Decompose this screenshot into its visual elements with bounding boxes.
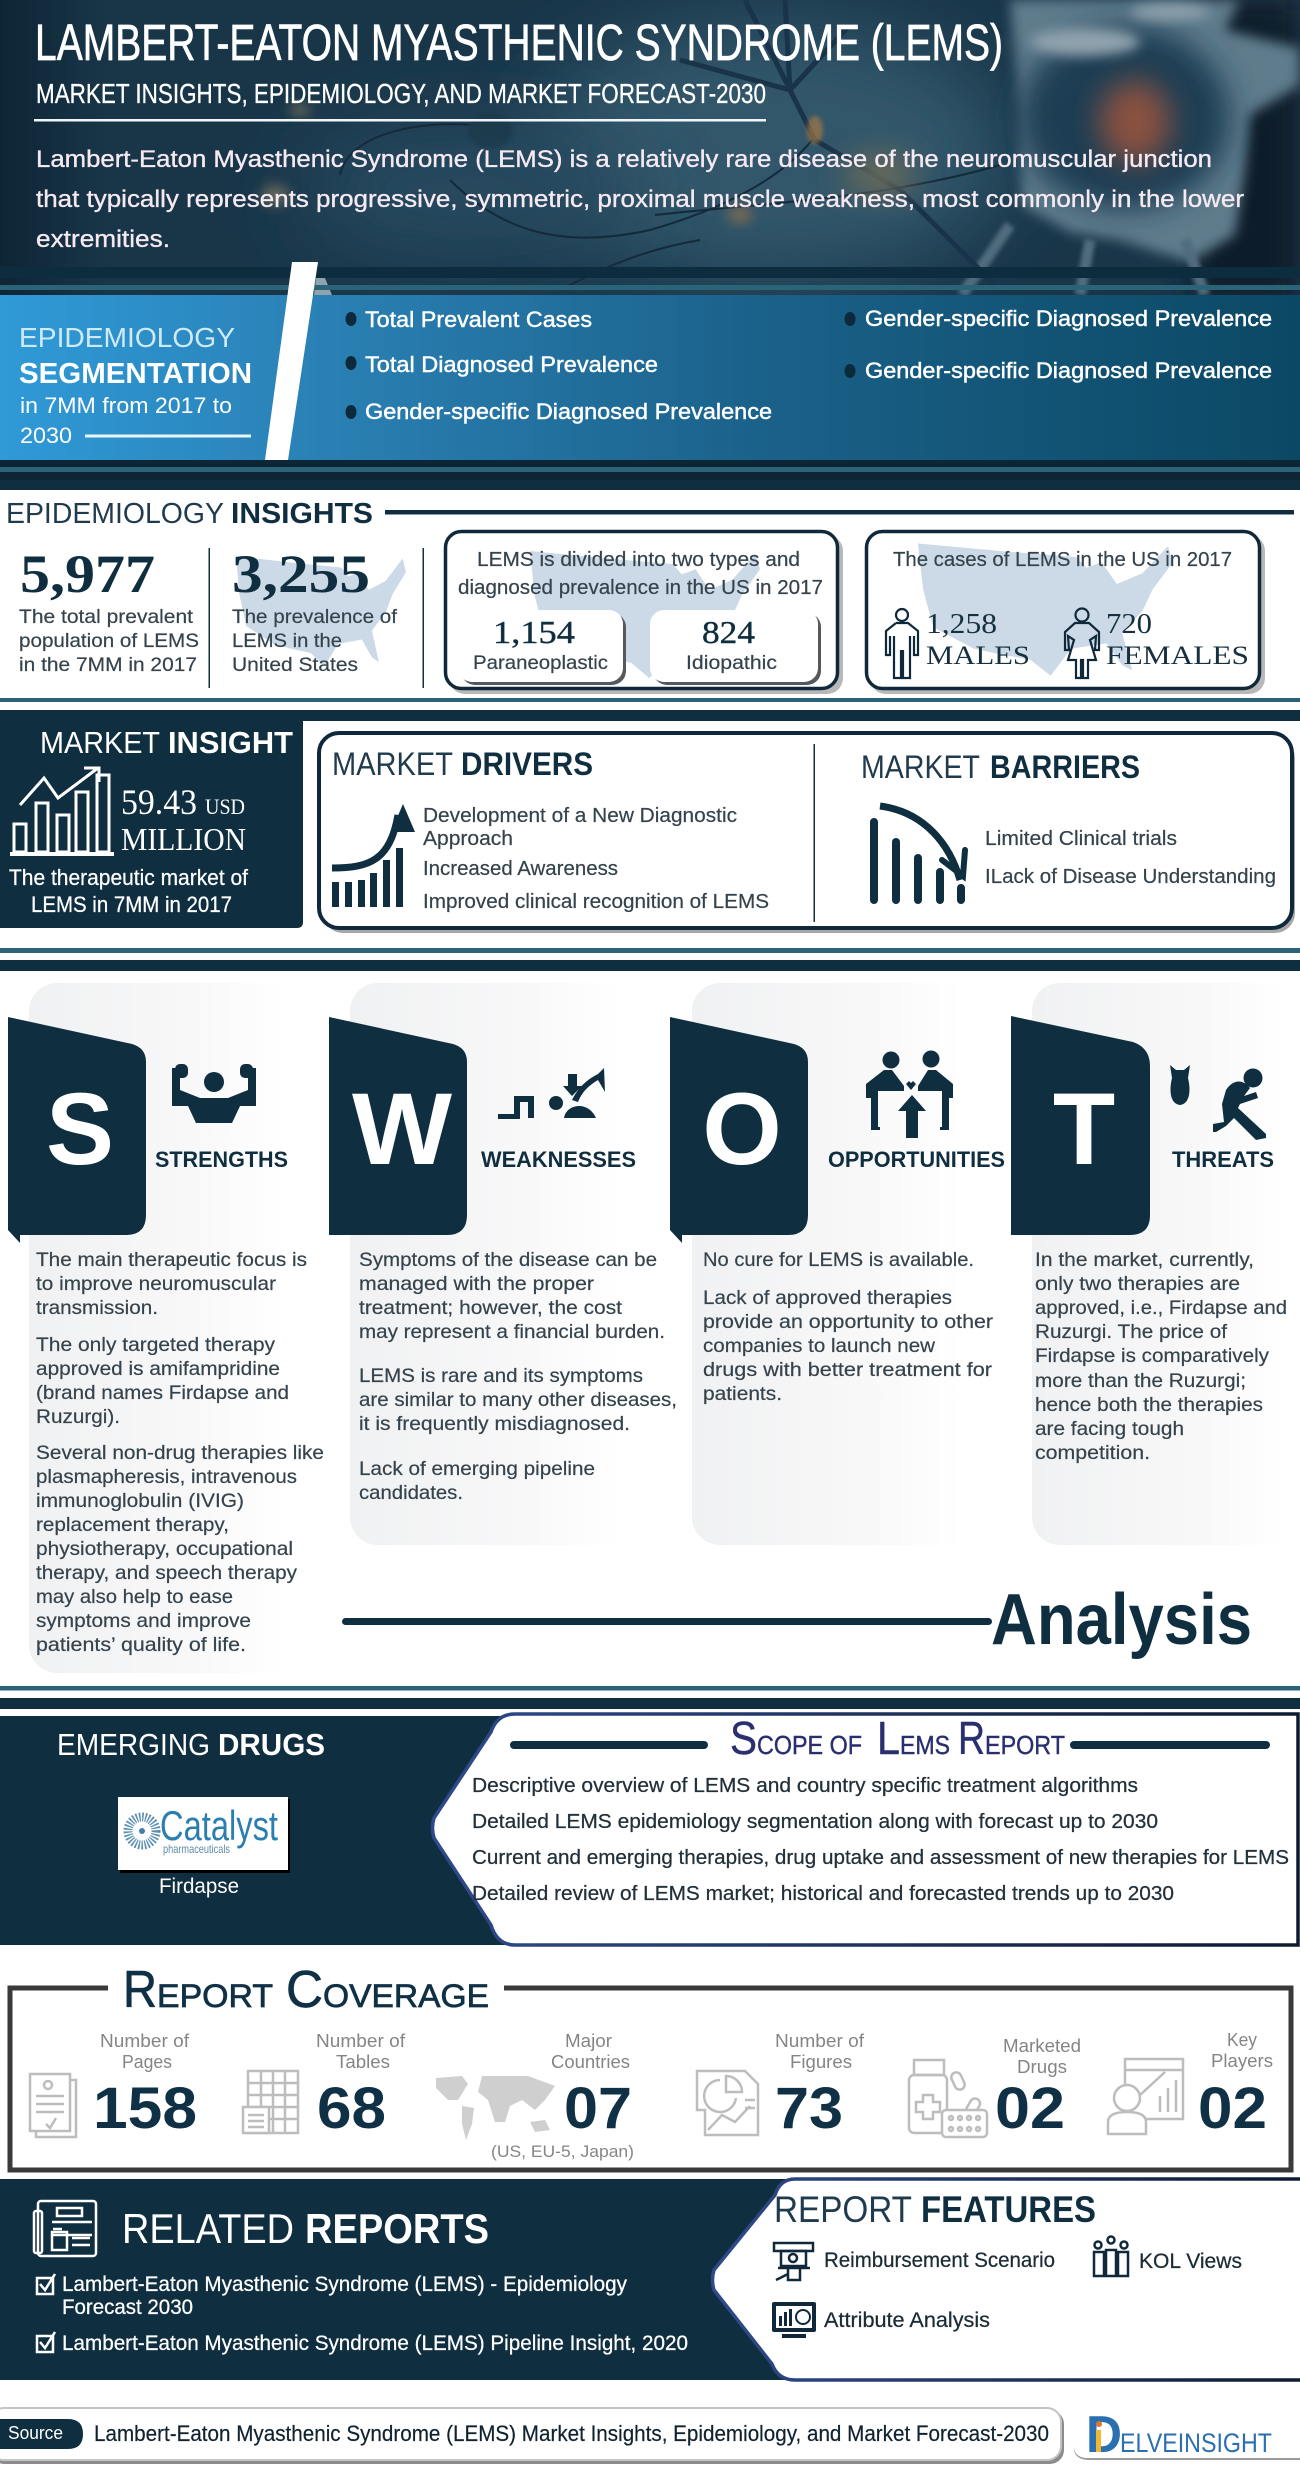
- tab: O: [670, 1017, 808, 1243]
- segmentation bullets: Total Prevalent Cases: [365, 307, 592, 332]
- tab: S: S: [46, 1072, 114, 1186]
- tab: W: W: [352, 1072, 453, 1186]
- weaknesses text: it is frequently misdiagnosed.: [359, 1413, 630, 1435]
- card: idiopathic: [650, 610, 821, 685]
- tab: T: T: [1053, 1072, 1115, 1186]
- opportunities text: Lack of approved therapies: [703, 1287, 952, 1309]
- stat: countries: Countries: [551, 2052, 630, 2072]
- related list: [37, 2273, 688, 2355]
- strengths text: replacement therapy,: [36, 1514, 229, 1536]
- scope heading: S: [730, 1712, 757, 1764]
- scope list: Detailed review of LEMS market; historical and forecasted trends up to 2030: [472, 1883, 1174, 1905]
- market drivers: Increased Awareness: [423, 858, 618, 880]
- scope list: [472, 1775, 1289, 1905]
- segmentation heading: [19, 322, 252, 448]
- stat: 5,977 prevalent population: in the 7MM in 2017: [19, 654, 197, 676]
- strengths text: patients’ quality of life.: [36, 1634, 246, 1656]
- market drivers: MARKET: [332, 746, 453, 782]
- stat: key players: [1108, 2030, 1273, 2141]
- stat: marketed drugs: Drugs: [1017, 2057, 1067, 2077]
- scope list: Detailed LEMS epidemiology segmentation along with forecast up to 2030: [472, 1811, 1158, 1833]
- panel: US cases by gender: The cases of LEMS in the US in 2017: [893, 549, 1232, 571]
- market value: [121, 782, 246, 857]
- strengths text: [36, 1249, 324, 1656]
- panel: report features: REPORT: [774, 2189, 912, 2230]
- female count: FEMALES: [1106, 641, 1249, 670]
- scope list: Descriptive overview of LEMS and country specific treatment algorithms: [472, 1775, 1138, 1797]
- logo: catalyst pharmaceuticals: Catalyst: [160, 1802, 278, 1849]
- threats text: hence both the therapies: [1035, 1394, 1263, 1416]
- icon: female: [1065, 608, 1099, 678]
- source bar: [0, 2408, 1064, 2464]
- stat: key players: Key: [1227, 2030, 1257, 2050]
- stat: 3,255 US prevalence with map: The prevalence of: [232, 606, 398, 628]
- market drivers: Development of a New Diagnostic: [423, 805, 737, 827]
- heading: analysis: [342, 1580, 1252, 1660]
- icon: bomb and kneeling person: [1170, 1065, 1266, 1140]
- strengths text: (brand names Firdapse and: [36, 1382, 289, 1404]
- feature: reimbursement scenario: [774, 2243, 1055, 2280]
- stat: figures: Figures: [790, 2052, 852, 2072]
- panel: US cases by gender: [866, 532, 1265, 694]
- dark and teal rules: [0, 480, 1300, 971]
- stat: 3,255 US prevalence with map: 3,255: [232, 544, 370, 604]
- source bar: Source: [8, 2423, 63, 2443]
- stat: key players: Players: [1211, 2051, 1273, 2071]
- tab: T: [1011, 1016, 1150, 1235]
- opportunities text: companies to launch new: [703, 1335, 936, 1357]
- stat: figures: [697, 2031, 865, 2141]
- card: paraneoplastic: [458, 610, 626, 685]
- scope heading: L: [877, 1712, 900, 1764]
- stat: marketed drugs: [909, 2036, 1081, 2141]
- card: idiopathic: Idiopathic: [686, 652, 777, 674]
- stat: 3,255 US prevalence with map: LEMS in the: [232, 630, 342, 652]
- market barriers: [861, 749, 1276, 900]
- stat: marketed drugs: 02: [995, 2076, 1065, 2141]
- opportunities text: drugs with better treatment for: [703, 1359, 993, 1381]
- opportunities text: patients.: [703, 1383, 782, 1405]
- icon: person crawling with arrows: [498, 1068, 605, 1119]
- opportunities text: [703, 1249, 994, 1405]
- threats text: approved, i.e., Firdapse and: [1035, 1297, 1287, 1319]
- panel: threats: THREATS: [1172, 1147, 1274, 1172]
- panel: opportunities: [670, 983, 1005, 1545]
- logo: DelveInsight: ELVEINSIGHT: [1120, 2428, 1272, 2458]
- panel: market insight: MARKET: [40, 725, 160, 760]
- stat: countries: [436, 2031, 634, 2161]
- stat: 5,977 prevalent population: 5,977: [20, 544, 155, 604]
- scope heading: EMS: [900, 1730, 950, 1760]
- related list: Lambert-Eaton Myasthenic Syndrome (LEMS) - Epidemiology: [62, 2273, 627, 2296]
- scope heading: COPE OF: [757, 1730, 862, 1760]
- panel: related reports: [0, 2179, 800, 2380]
- logo: DelveInsight: D: [1086, 2406, 1122, 2464]
- stat: 5,977 prevalent population: [19, 544, 199, 676]
- panel: strengths: STRENGTHS: [155, 1147, 288, 1172]
- strengths text: approved is amifampridine: [36, 1358, 280, 1380]
- icon: rising arrow: [332, 804, 415, 907]
- stat: figures: Number of: [775, 2031, 865, 2051]
- heading: epidemiology insights: [6, 498, 1294, 530]
- header background: neuron image: [0, 0, 1300, 295]
- coverage heading: C: [286, 1961, 323, 2019]
- panel: related reports: RELATED: [122, 2205, 294, 2252]
- panel: market insight: LEMS in 7MM in 2017: [31, 892, 232, 917]
- panel: report features: [712, 2179, 1300, 2380]
- strengths text: to improve neuromuscular: [36, 1273, 277, 1295]
- intro paragraph: Lambert-Eaton Myasthenic Syndrome (LEMS) is a relatively rare disease of the neuromuscular junction: [36, 146, 1212, 173]
- coverage heading: EPORT: [157, 1978, 273, 2014]
- panel: opportunities: OPPORTUNITIES: [828, 1147, 1005, 1172]
- icon: two people and arrow: [866, 1050, 953, 1138]
- stat: 5,977 prevalent population: population of LEMS: [19, 630, 199, 652]
- related list: Lambert-Eaton Myasthenic Syndrome (LEMS) Pipeline Insight, 2020: [62, 2332, 688, 2355]
- strengths text: plasmapheresis, intravenous: [36, 1466, 297, 1488]
- strengths text: symptoms and improve: [36, 1610, 251, 1632]
- scope heading: EPORT: [985, 1730, 1065, 1760]
- panel: weaknesses: [329, 983, 677, 1545]
- strengths text: The main therapeutic focus is: [36, 1249, 307, 1271]
- opportunities text: No cure for LEMS is available.: [703, 1249, 974, 1271]
- panel: report coverage: [10, 1961, 1291, 2170]
- panel: weaknesses: WEAKNESSES: [481, 1147, 636, 1172]
- threats text: Ruzurgi. The price of: [1035, 1321, 1228, 1343]
- panel: market drivers and barriers: [319, 733, 1295, 933]
- stat: pages: [30, 2031, 197, 2141]
- panel: emerging drugs: DRUGS: [218, 1727, 325, 1762]
- female count: 720: [1106, 609, 1152, 640]
- segmentation heading: in 7MM from 2017 to: [20, 393, 232, 418]
- strengths text: immunoglobulin (IVIG): [36, 1490, 244, 1512]
- weaknesses text: are similar to many other diseases,: [359, 1389, 677, 1411]
- stat: marketed drugs: Marketed: [1003, 2036, 1081, 2056]
- card: idiopathic: 824: [702, 614, 755, 650]
- market drivers: Improved clinical recognition of LEMS: [423, 891, 769, 913]
- market value: MILLION: [121, 821, 246, 857]
- segmentation bullets: Gender-specific Diagnosed Prevalence: [865, 358, 1272, 383]
- panel: report features: FEATURES: [921, 2189, 1096, 2230]
- strengths text: Ruzurgi).: [36, 1406, 120, 1428]
- segmentation bullets: Total Diagnosed Prevalence: [365, 352, 658, 377]
- strengths text: Several non-drug therapies like: [36, 1442, 324, 1464]
- panel: disease types: [446, 532, 843, 694]
- feature: KOL views: [1094, 2236, 1242, 2276]
- market barriers: BARRIERS: [990, 749, 1140, 785]
- stat: 3,255 US prevalence with map: [232, 544, 406, 676]
- market value: 59.43: [121, 782, 197, 822]
- logo: catalyst pharmaceuticals: [118, 1797, 290, 1873]
- panel: threats: [1011, 983, 1300, 1545]
- feature: attribute analysis: Attribute Analysis: [824, 2309, 990, 2332]
- segmentation bullets: [346, 306, 1272, 424]
- segmentation bullets: Gender-specific Diagnosed Prevalence: [865, 306, 1272, 331]
- tab: S: [8, 1017, 146, 1243]
- panel: market insight: The therapeutic market of: [9, 865, 249, 890]
- strengths text: The only targeted therapy: [36, 1334, 275, 1356]
- market barriers: MARKET: [861, 749, 980, 785]
- strengths text: transmission.: [36, 1297, 158, 1319]
- feature: attribute analysis: [772, 2302, 990, 2338]
- icon: rising bar chart: [10, 768, 114, 854]
- feature: reimbursement scenario: Reimbursement Scenario: [824, 2249, 1055, 2272]
- panel: emerging drugs: Firdapse: [159, 1875, 239, 1898]
- stat: countries: Major: [565, 2031, 612, 2051]
- stat: pages: Number of: [100, 2031, 190, 2051]
- card: paraneoplastic: 1,154: [493, 614, 575, 650]
- subtitle: MARKET INSIGHTS, EPIDEMIOLOGY, AND MARKET FORECAST-2030: [36, 78, 766, 109]
- panel: epidemiology segmentation: [0, 262, 1300, 460]
- stat: countries: (US, EU-5, Japan): [491, 2142, 634, 2161]
- panel: disease types: LEMS is divided into two types and: [477, 549, 800, 571]
- logo: DelveInsight: [1074, 2403, 1300, 2464]
- male count: MALES: [926, 641, 1030, 670]
- coverage heading: R: [123, 1961, 157, 2019]
- segmentation heading: EPIDEMIOLOGY: [19, 322, 235, 353]
- market barriers: Limited Clinical trials: [985, 828, 1177, 850]
- white slash: [265, 262, 318, 460]
- stat: pages: Pages: [122, 2052, 172, 2072]
- market value: USD: [205, 794, 245, 819]
- related list: Forecast 2030: [62, 2296, 193, 2319]
- threats text: more than the Ruzurgi;: [1035, 1370, 1246, 1392]
- stat: pages: 158: [93, 2076, 197, 2141]
- panel: emerging drugs: [0, 1716, 560, 1945]
- coverage heading: OVERAGE: [323, 1978, 489, 2014]
- weaknesses text: Lack of emerging pipeline: [359, 1458, 595, 1480]
- segmentation heading: SEGMENTATION: [19, 358, 252, 390]
- male count: [926, 609, 1030, 670]
- female count: [1106, 609, 1249, 670]
- strengths text: therapy, and speech therapy: [36, 1562, 297, 1584]
- intro paragraph: [36, 146, 1244, 253]
- icon: report sheet: [34, 2201, 96, 2256]
- logo: catalyst pharmaceuticals: pharmaceuticals: [163, 1842, 230, 1856]
- stat: countries: 07: [564, 2076, 632, 2141]
- threats text: competition.: [1035, 1442, 1150, 1464]
- segmentation heading: 2030: [20, 423, 72, 448]
- weaknesses text: LEMS is rare and its symptoms: [359, 1365, 643, 1387]
- icon: falling arrow: [874, 806, 965, 900]
- threats text: only two therapies are: [1035, 1273, 1240, 1295]
- stat: 5,977 prevalent population: The total prevalent: [19, 606, 194, 628]
- strengths text: may also help to ease: [36, 1586, 233, 1608]
- heading: epidemiology insights: INSIGHTS: [231, 498, 373, 530]
- stat: tables: Tables: [336, 2052, 390, 2072]
- weaknesses text: candidates.: [359, 1482, 463, 1504]
- icon: strong person: [172, 1064, 256, 1123]
- heading: epidemiology insights: EPIDEMIOLOGY: [6, 498, 224, 530]
- stat: tables: Number of: [316, 2031, 406, 2051]
- heading: analysis: Analysis: [991, 1580, 1252, 1660]
- market drivers: [332, 746, 769, 913]
- intro paragraph: extremities.: [36, 226, 170, 253]
- segmentation bullets: Gender-specific Diagnosed Prevalence: [365, 399, 772, 424]
- weaknesses text: may represent a financial burden.: [359, 1321, 665, 1343]
- scope heading: R: [958, 1712, 985, 1764]
- male count: 1,258: [926, 609, 997, 640]
- threats text: Firdapse is comparatively: [1035, 1345, 1269, 1367]
- stat: figures: 73: [775, 2076, 843, 2141]
- threats text: In the market, currently,: [1035, 1249, 1254, 1271]
- feature: KOL views: KOL Views: [1139, 2250, 1242, 2273]
- dark and teal bands under header: [0, 267, 1300, 490]
- strengths text: physiotherapy, occupational: [36, 1538, 293, 1560]
- market barriers: ILack of Disease Understanding: [985, 866, 1276, 888]
- coverage heading: [123, 1961, 489, 2019]
- icon: male: [886, 609, 918, 678]
- stat: tables: 68: [317, 2076, 386, 2141]
- weaknesses text: managed with the proper: [359, 1273, 595, 1295]
- weaknesses text: [359, 1249, 677, 1504]
- threats text: [1035, 1249, 1287, 1464]
- card: paraneoplastic: Paraneoplastic: [473, 652, 608, 674]
- panel: disease types: diagnosed prevalence in the US in 2017: [458, 577, 823, 599]
- scope heading: [730, 1712, 1065, 1764]
- stat: tables: [243, 2031, 406, 2141]
- title: LAMBERT-EATON MYASTHENIC SYNDROME (LEMS): [35, 14, 1003, 71]
- scope list: Current and emerging therapies, drug uptake and assessment of new therapies for LEMS: [472, 1847, 1289, 1869]
- panel: emerging drugs: EMERGING: [57, 1727, 210, 1762]
- market drivers: DRIVERS: [461, 746, 593, 782]
- panel: related reports: REPORTS: [305, 2205, 489, 2252]
- panel: market insight: INSIGHT: [168, 725, 293, 760]
- stat: key players: 02: [1198, 2076, 1267, 2141]
- intro paragraph: that typically represents progressive, symmetric, proximal muscle weakness, most commonly in the lower: [36, 186, 1244, 213]
- tab: W: [329, 1017, 467, 1235]
- panel: strengths: [8, 983, 324, 1673]
- panel: scope of LEMS report: [432, 1712, 1298, 1945]
- source bar: Lambert-Eaton Myasthenic Syndrome (LEMS) Market Insights, Epidemiology, and Market Forecast-2030: [94, 2421, 1049, 2446]
- threats text: are facing tough: [1035, 1418, 1184, 1440]
- weaknesses text: treatment; however, the cost: [359, 1297, 623, 1319]
- weaknesses text: Symptoms of the disease can be: [359, 1249, 657, 1271]
- rules before emerging drugs: [0, 1686, 1300, 1709]
- market drivers: Approach: [423, 828, 513, 850]
- panel: market insight: [0, 710, 303, 928]
- tab: O: O: [702, 1072, 782, 1186]
- opportunities text: provide an opportunity to other: [703, 1311, 994, 1333]
- stat: 3,255 US prevalence with map: United States: [232, 654, 358, 676]
